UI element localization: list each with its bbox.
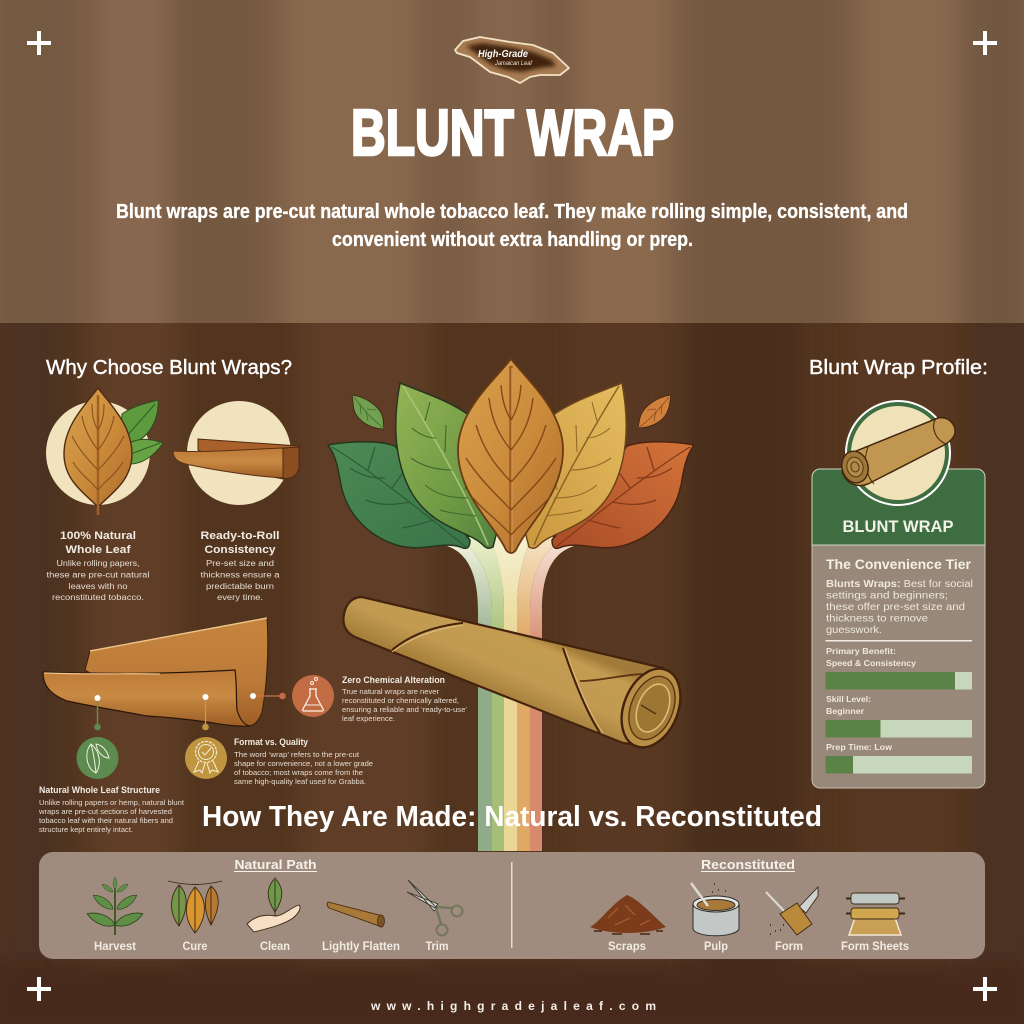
divider <box>826 640 972 642</box>
icon: pot with spoon <box>691 883 739 936</box>
icon: whole leaf on circle <box>46 388 163 515</box>
icon: quality rosette badge <box>185 737 227 779</box>
callout text: format vs quality: same high-quality leaf used for Grabba. <box>234 777 366 786</box>
step: scraps: Scraps <box>608 939 646 953</box>
flat wrap sheet <box>43 618 268 726</box>
rainbow stem from leaves <box>447 530 574 851</box>
subtitle <box>116 201 908 251</box>
lower band wood <box>0 300 1024 1024</box>
callout pins <box>94 693 286 730</box>
callout text: format vs quality: The word ‘wrap’ refers to the pre-cut <box>234 750 360 759</box>
callout text: natural whole leaf structure: structure kept entirely intact. <box>39 825 133 834</box>
icon: leaf badge <box>76 737 118 779</box>
metric: primary benefit: Primary Benefit: <box>826 646 896 656</box>
center tan leaf <box>458 359 563 553</box>
card body <box>812 545 985 788</box>
website url: www.highgradejaleaf.com <box>370 999 656 1013</box>
subtitle: Blunt wraps are pre-cut natural whole tobacco leaf. They make rolling simple, consistent, and <box>116 201 908 223</box>
step: form sheets: Form Sheets <box>841 939 909 953</box>
icon: scissors <box>407 880 462 936</box>
feature: ready-to-roll consistency <box>173 401 299 602</box>
callout text: natural whole leaf structure: wraps are pre-cut sections of harvested <box>38 807 172 816</box>
label: ready-to-roll: predictable burn <box>206 582 274 591</box>
label: ready-to-roll <box>200 530 280 602</box>
callout text: format vs quality: Format vs. Quality <box>234 737 308 747</box>
icon: rollers and sheet <box>846 893 905 935</box>
step: trim <box>407 880 462 953</box>
section title: reconstituted: Reconstituted <box>701 857 795 872</box>
heading: why choose: Why Choose Blunt Wraps? <box>46 357 292 379</box>
metric: skill level: Beginner <box>826 706 865 716</box>
section title: natural path: Natural Path <box>234 857 317 872</box>
callout text: zero chemical <box>342 675 467 723</box>
diagram: flat blunt wrap with callouts <box>38 618 467 834</box>
subtitle: convenient without extra handling or prep. <box>332 229 693 251</box>
step: clean <box>247 878 300 953</box>
logo: high grade jamaican leaf <box>455 37 569 83</box>
label: 100% natural: Whole Leaf <box>66 544 131 556</box>
label: ready-to-roll: thickness ensure a <box>200 570 280 580</box>
icon: flask badge <box>292 675 334 717</box>
icon: rolled wrap medallion <box>838 401 955 505</box>
leaf fan <box>328 359 694 553</box>
callout text: natural whole leaf structure: Unlike rolling papers or hemp, natural blunt <box>39 798 185 807</box>
step: form <box>766 887 818 953</box>
tier description <box>826 578 973 636</box>
lime green leaf <box>396 383 505 548</box>
title: BLUNT WRAP <box>351 96 674 169</box>
callout text: zero chemical: Zero Chemical Alteration <box>342 675 445 685</box>
step: trim: Trim <box>426 939 448 953</box>
metric: skill level <box>826 694 972 738</box>
step: lightly flatten <box>322 902 400 953</box>
label: ready-to-roll: Ready-to-Roll <box>200 530 280 542</box>
step: pulp <box>691 883 739 953</box>
label: 100% natural: leaves with no <box>68 582 128 591</box>
tier description: Blunts Wraps: Best for social <box>826 578 973 590</box>
callout text: format vs quality <box>234 737 373 786</box>
tier heading: The Convenience Tier <box>826 556 972 572</box>
label: ready-to-roll: every time. <box>217 593 263 602</box>
label: ready-to-roll: Consistency <box>204 544 276 556</box>
callout text: format vs quality: shape for convenience, not a lower grade <box>234 759 373 768</box>
step: clean: Clean <box>260 939 290 953</box>
step: harvest <box>85 877 145 953</box>
metric: prep time: Prep Time: Low <box>826 742 892 752</box>
step: cure: Cure <box>182 939 208 953</box>
callout text: zero chemical: leaf experience. <box>342 714 395 723</box>
feature: 100% natural whole leaf <box>46 388 163 602</box>
callout text: zero chemical: ensuring a reliable and ‘ready-to-use’ <box>342 705 467 714</box>
tier description: settings and beginners; <box>826 590 948 602</box>
callout text: natural whole leaf structure <box>38 785 185 834</box>
icon: wrap on circle <box>173 401 299 505</box>
tier description: guesswork. <box>826 624 882 636</box>
card title: BLUNT WRAP <box>842 517 954 536</box>
icon: pile of scraps <box>590 895 666 934</box>
tier description: these offer pre-set size and <box>826 601 965 613</box>
yellow leaf <box>517 383 626 548</box>
callout text: zero chemical: True natural wraps are never <box>342 687 439 696</box>
header band wood <box>0 0 1024 323</box>
step: cure <box>168 881 222 953</box>
callout text: natural whole leaf structure: Natural Whole Leaf Structure <box>39 785 160 795</box>
icon: hanging leaves <box>168 881 222 933</box>
label: 100% natural: these are pre-cut natural <box>46 570 150 580</box>
panel: process comparison <box>39 852 985 959</box>
tier description: thickness to remove <box>826 612 928 624</box>
roll end spiral <box>611 660 691 756</box>
logo: high grade jamaican leaf: High-Grade <box>478 49 528 60</box>
step: pulp: Pulp <box>704 939 728 953</box>
panel: blunt wrap profile card <box>812 401 985 788</box>
step: lightly flatten: Lightly Flatten <box>322 939 400 953</box>
callout text: format vs quality: of tobacco; most wraps come from the <box>234 768 363 777</box>
heading: profile: Blunt Wrap Profile: <box>809 357 988 379</box>
card header <box>812 469 985 545</box>
red leaf <box>552 442 694 548</box>
icon: plant <box>85 877 145 935</box>
metric: primary benefit: Speed & Consistency <box>826 658 916 668</box>
label: ready-to-roll: Pre-set size and <box>206 559 274 568</box>
rolled blunt wrap <box>343 597 691 756</box>
small orange leaf <box>638 395 671 428</box>
metric: skill level: Skill Level: <box>826 694 871 704</box>
icon: hand with leaf <box>247 878 300 932</box>
label: 100% natural: 100% Natural <box>60 530 136 542</box>
metric: prep time <box>826 742 972 774</box>
callout text: zero chemical: reconstituted or chemically altered, <box>342 696 459 705</box>
callout text: natural whole leaf structure: tobacco leaf with their natural fibers and <box>39 816 173 825</box>
icon: small roll <box>327 902 384 927</box>
step: form sheets <box>841 893 909 953</box>
wrap seams <box>392 623 642 733</box>
label: 100% natural: reconstituted tobacco. <box>52 593 144 602</box>
step: form: Form <box>775 939 803 953</box>
step: harvest: Harvest <box>94 939 136 953</box>
icon: form press <box>766 887 818 935</box>
step: scraps <box>590 895 666 953</box>
logo: high grade jamaican leaf: Jamaican Leaf <box>494 61 533 67</box>
small green leaf <box>352 395 384 429</box>
label: 100% natural: Unlike rolling papers, <box>56 559 140 568</box>
metric: primary benefit <box>826 646 972 690</box>
label: 100% natural <box>46 530 150 602</box>
heading: how they are made: How They Are Made: Natural vs. Reconstituted <box>202 801 822 833</box>
dark green leaf <box>328 442 470 548</box>
